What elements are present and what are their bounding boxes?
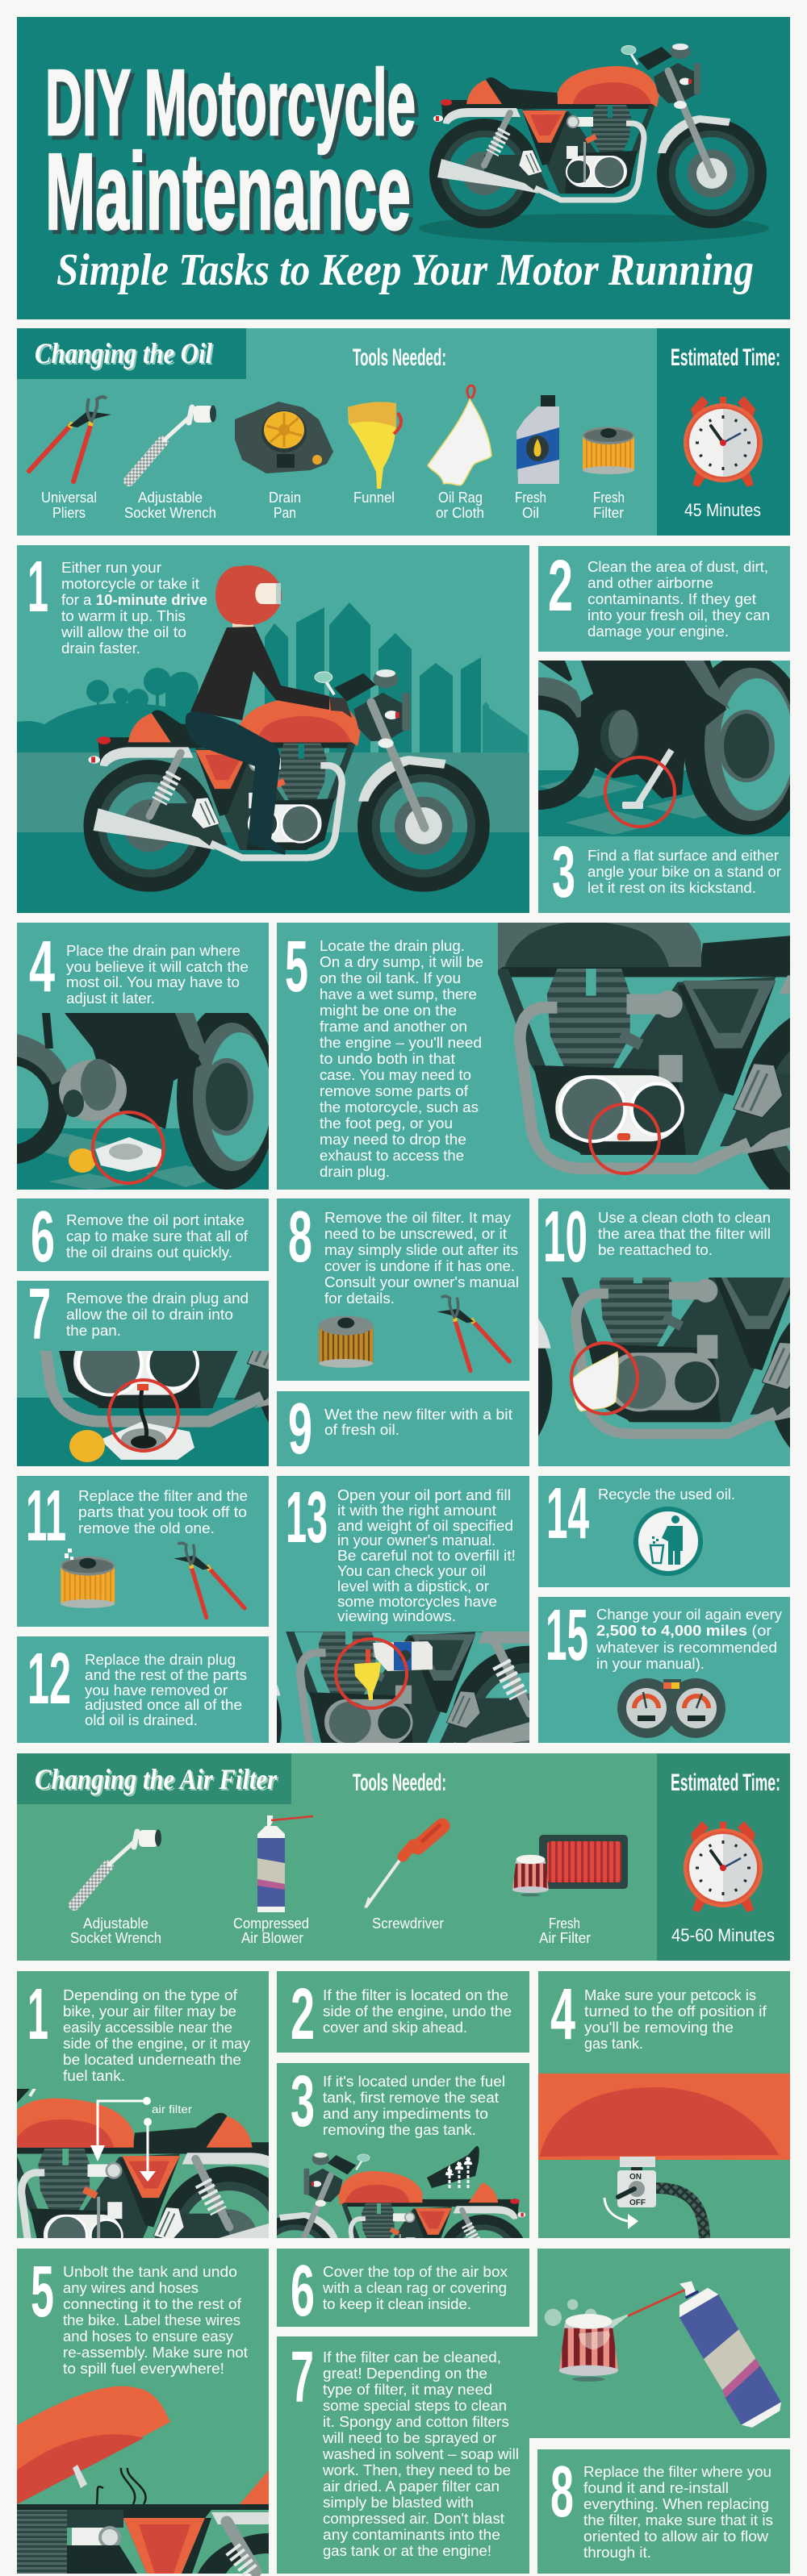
icon: alarm clock [684, 396, 763, 487]
step 13 text: You can check your oil [337, 1563, 486, 1579]
tool labels: Socket Wrench [124, 505, 216, 521]
step 5 text [63, 2264, 248, 2377]
heading: DIY Motorcycle Maintenance: DIY Motorcycle [49, 54, 420, 159]
tool labels: Drain [269, 490, 301, 506]
motorcycle with air filter callouts [17, 2089, 269, 2238]
step 5 text: drain plug. [320, 1164, 390, 1180]
gas tank and petcock illustration [538, 2074, 790, 2238]
air filter arrows: air filter [152, 2103, 192, 2115]
oil filling illustration [277, 1632, 529, 1743]
icon: dirty filter [319, 1316, 373, 1368]
panel: oil step 8 [277, 1197, 529, 1381]
step 13 text: and weight of oil specified [337, 1518, 513, 1534]
panel: air step 4 [538, 1971, 790, 2238]
icon: recycle bin [636, 1509, 700, 1574]
step 1 text: fuel tank. [63, 2068, 125, 2084]
step 8 text: need to be unscrewed, or it [324, 1226, 507, 1242]
panel: oil step 14 [538, 1473, 790, 1587]
step 8 text: cover is undone if it has one. [324, 1258, 515, 1274]
icon: fresh oil filter [583, 427, 634, 474]
tool labels: Air Blower [241, 1930, 303, 1946]
step 13 text: Open your oil port and fill [337, 1487, 511, 1503]
step number 13: 13 [286, 1478, 328, 1558]
panel: oil step 6 [17, 1197, 269, 1278]
heading: changing the oil: Changing the Oil [35, 337, 212, 369]
step 2 text [587, 559, 770, 640]
step 2 text: into your fresh oil, they can [587, 607, 770, 623]
title banner [17, 17, 790, 319]
step number 8: 8 [550, 2452, 574, 2532]
step number 1: 1 [27, 1974, 48, 2055]
step 2 text [323, 1987, 512, 2036]
step 5 text: any wires and hoses [63, 2280, 199, 2296]
oil draining illustration [17, 1351, 269, 1466]
drain pan illustration [17, 1013, 269, 1190]
step 5 text: the engine – you'll need [320, 1035, 482, 1051]
step 3 text: removing the gas tank. [323, 2122, 476, 2138]
step 5 text: may need to drop the [320, 1132, 466, 1148]
tool labels: Pan [274, 505, 296, 521]
estimated time value: 45 Minutes [684, 500, 761, 520]
step 12 text: Replace the drain plug [85, 1652, 236, 1668]
panel: oil step 7 [17, 1281, 269, 1466]
step 4 text: Place the drain pan where [66, 943, 240, 959]
step number 14: 14 [546, 1473, 589, 1554]
heading: changing the air filter: Changing the Air Filter [36, 1765, 279, 1797]
estimated time value: 45-60 Minutes [671, 1925, 775, 1945]
step 3 text [323, 2074, 505, 2138]
step 2 text: Clean the area of dust, dirt, [587, 559, 768, 575]
tool labels: Oil [522, 505, 539, 521]
step 10 text: the area that the filter will [598, 1226, 771, 1242]
icon: gauges [617, 1678, 725, 1738]
step 13 text: Be careful not to overfill it! [337, 1548, 516, 1564]
step 7 text: Remove the drain plug and [66, 1290, 249, 1307]
step 13 text: level with a dipstick, or [337, 1578, 489, 1594]
step 5 text: the foot peg, or you [320, 1115, 453, 1132]
step 7 text: washed in solvent – soap will [322, 2446, 519, 2462]
step 7 text: compressed air. Don't blast [323, 2511, 504, 2527]
step 8 text: found it and re-install [583, 2480, 729, 2496]
step 11 text: remove the old one. [78, 1520, 215, 1536]
tool labels: Air Filter [539, 1930, 591, 1946]
step 5 text: might be one on the [320, 1002, 457, 1019]
heading: tools needed: Tools Needed: [353, 344, 446, 371]
step 5 text: and hoses to ensure easy [63, 2328, 233, 2345]
step 5 text: On a dry sump, it will be [320, 954, 483, 970]
step number 11: 11 [26, 1476, 66, 1557]
icon: universal pliers [29, 397, 111, 481]
step 5 text: Locate the drain plug. [320, 938, 465, 954]
heading: changing the oil: Changing the Oil [36, 339, 214, 371]
step number 7: 7 [28, 1274, 51, 1355]
step 7 text: air dried. A paper filter can [323, 2478, 500, 2495]
panel: oil step 3 [538, 661, 790, 913]
step 15 text: in your manual). [596, 1656, 705, 1672]
spraying filter [545, 2281, 781, 2428]
step 5 text: frame and another on [320, 1019, 467, 1035]
step 5 text [320, 938, 483, 1180]
step 4 text: most oil. You may have to [66, 974, 240, 990]
step 5 text: on the oil tank. If you [320, 970, 461, 986]
step 1 text: motorcycle or take it [61, 576, 199, 592]
panel: oil step 10 [538, 1198, 790, 1466]
step 4 text [66, 943, 249, 1007]
step 4 text: gas tank. [584, 2036, 643, 2052]
step 11 text: parts that you took off to [78, 1504, 247, 1520]
step 6 text: cap to make sure that all of [66, 1228, 249, 1244]
step 5 text: to undo both in that [320, 1051, 455, 1067]
step number 10: 10 [543, 1197, 587, 1278]
step 2 text: and other airborne [587, 575, 713, 591]
step number 3: 3 [552, 832, 575, 913]
step 5 text: have a wet sump, there [320, 986, 477, 1002]
step 5 text: remove some parts of [320, 1083, 469, 1099]
icon: drain pan [235, 402, 333, 473]
panel: air spray illustration [529, 2249, 790, 2438]
tool labels: Oil Rag [438, 490, 483, 506]
heading: DIY Motorcycle Maintenance [45, 50, 420, 256]
tool labels: Funnel [353, 490, 395, 506]
tool labels: Fresh [593, 490, 625, 506]
icon: socket wrench [129, 405, 216, 481]
heading: changing the air filter: Changing the Air Filter [35, 1763, 278, 1795]
panel: oil step 4 [0, 923, 277, 1190]
panel: air step 6 [277, 2249, 529, 2332]
step 5 text: case. You may need to [320, 1067, 471, 1083]
step number 8: 8 [288, 1197, 312, 1278]
step 3 text: let it rest on its kickstand. [587, 880, 756, 896]
step 7 text: gas tank or at the engine! [323, 2543, 491, 2559]
step number 4: 4 [29, 927, 55, 1007]
step number 2: 2 [291, 1974, 315, 2055]
step 11 text: Replace the filter and the [78, 1488, 248, 1504]
step 14 text: Recycle the used oil. [598, 1486, 735, 1503]
step 8 text [583, 2464, 773, 2561]
step number 6: 6 [291, 2251, 315, 2332]
step 10 text: Use a clean cloth to clean [598, 1210, 771, 1226]
step number 4: 4 [550, 1974, 575, 2055]
step 6 text: with a clean rag or covering [322, 2280, 507, 2296]
step 1 text: Either run your [61, 560, 161, 576]
motorcycle with lifted seat [277, 2145, 526, 2238]
tool labels: Adjustable [138, 490, 203, 506]
panel: changing the air filter tools [17, 1753, 790, 1961]
step 3 text: Find a flat surface and either [587, 848, 779, 864]
lifted gas tank illustration [17, 2386, 269, 2574]
icon: pliers [174, 1543, 245, 1617]
panel: changing the oil tools [17, 328, 790, 536]
step number 12: 12 [27, 1639, 71, 1719]
icon: oil rag [428, 386, 491, 486]
step 4 text: you'll be removing the [584, 2020, 734, 2036]
step 2 text: cover and skip ahead. [323, 2020, 467, 2036]
tool labels: Universal [41, 490, 97, 506]
panel: air step 1 [17, 1971, 269, 2238]
icon: socket wrench [74, 1829, 161, 1905]
cleaning illustration [538, 1278, 790, 1448]
panel: oil step 15 [538, 1595, 790, 1743]
icon: drips [65, 1549, 73, 1560]
step 7 text: type of filter, it may need [323, 2382, 492, 2398]
step 8 text: everything. When replacing [583, 2496, 769, 2512]
step 5 text: connecting it to the rest of [63, 2296, 242, 2312]
tool labels [70, 1915, 591, 1946]
drain plug illustration [498, 923, 790, 1190]
air filter arrows [90, 2097, 192, 2182]
step 15 text: 2,500 to 4,000 miles (or [596, 1623, 771, 1639]
step 7 text: the pan. [66, 1323, 121, 1339]
step 1 text: side of the engine, or it may [63, 2036, 250, 2052]
step 8 text: the filter, make sure that it is [583, 2512, 773, 2528]
step 7 text [322, 2349, 519, 2559]
step 15 text [596, 1607, 782, 1672]
step 1 text: drain faster. [61, 640, 140, 657]
step 1 text: bike, your air filter may be [63, 2003, 236, 2020]
step 13 text: some motorcycles have [337, 1594, 497, 1610]
step 4 text: you believe it will catch the [66, 959, 249, 975]
step 12 text: and the rest of the parts [85, 1667, 247, 1683]
step 6 text: to keep it clean inside. [323, 2296, 471, 2312]
step 13 text: in your owner's manual. [337, 1532, 495, 1549]
step 2 text: side of the engine, undo the [323, 2003, 512, 2020]
tool labels: Screwdriver [372, 1915, 444, 1932]
step number 5: 5 [31, 2252, 54, 2332]
icon: alarm clock [684, 1821, 763, 1912]
icon: fresh air filters [512, 1835, 628, 1896]
step 6 text [322, 2264, 508, 2312]
tool labels: Socket Wrench [70, 1930, 161, 1946]
tool labels: or Cloth [436, 505, 484, 521]
step 1 text [63, 1987, 250, 2084]
step 13 text: it with the right amount [337, 1503, 496, 1519]
step 8 text: may simply slide out after its [324, 1242, 518, 1258]
step 1 text: to warm it up. This [61, 608, 186, 624]
heading: DIY Motorcycle Maintenance: Maintenance [45, 131, 411, 252]
step 3 text: tank, first remove the seat [323, 2090, 499, 2106]
panel: oil step 13 [277, 1476, 529, 1743]
panel: oil step 1 [17, 545, 529, 913]
tool labels: Pliers [52, 505, 86, 521]
step 9 text [324, 1407, 512, 1438]
step 3 text [587, 848, 781, 896]
step 5 text: re-assembly. Make sure not [63, 2345, 248, 2361]
step 8 text: Remove the oil filter. It may [324, 1210, 511, 1226]
tool labels: Filter [593, 505, 624, 521]
panel: oil step 2 [538, 546, 790, 652]
step 6 text: the oil drains out quickly. [66, 1244, 232, 1261]
step 6 text: Cover the top of the air box [323, 2264, 508, 2280]
gas tank and petcock illustration: ON [629, 2173, 642, 2182]
step 7 text [66, 1290, 249, 1339]
step 2 text: contaminants. If they get [587, 591, 756, 607]
heading: DIY Motorcycle Maintenance: Maintenance [49, 135, 415, 256]
gas tank and petcock illustration: OFF [629, 2199, 646, 2207]
icon: new filter [61, 1557, 115, 1608]
step 7 text: will need to be sprayed or [322, 2430, 496, 2446]
step 8 text: for details. [324, 1290, 395, 1307]
panel: air step 3 [277, 2063, 529, 2238]
step 1 text: be located underneath the [63, 2052, 241, 2068]
tool labels [41, 490, 625, 521]
step 4 text: turned to the off position if [584, 2003, 767, 2020]
step number 7: 7 [291, 2337, 314, 2418]
step 12 text: old oil is drained. [85, 1712, 198, 1728]
panel: air step 8 [537, 2449, 790, 2574]
city skyline and park background [17, 602, 529, 913]
step 11 text [78, 1488, 248, 1536]
step 1 text: for a 10-minute drive [61, 592, 207, 608]
step 9 text: Wet the new filter with a bit [324, 1407, 512, 1423]
step 4 text: adjust it later. [66, 990, 155, 1007]
step number 6: 6 [31, 1197, 55, 1278]
tool labels: Adjustable [83, 1915, 148, 1932]
icon: funnel [348, 402, 401, 489]
tool labels: Fresh [549, 1915, 580, 1932]
motorcycle with rider [89, 565, 483, 885]
panel: oil step 5 [277, 923, 790, 1190]
step 7 text: great! Depending on the [323, 2366, 487, 2382]
heading: DIY Motorcycle Maintenance: DIY Motorcycle [45, 50, 416, 155]
step 10 text: be reattached to. [598, 1242, 713, 1258]
step 13 text [337, 1487, 516, 1624]
step 1 text: will allow the oil to [61, 624, 186, 640]
step 5 text: the bike. Label these wires [63, 2312, 240, 2328]
step 7 text: some special steps to clean [323, 2398, 507, 2414]
step 5 text: the motorcycle, such as [320, 1099, 479, 1115]
step 7 text: any contaminants into the [323, 2527, 500, 2543]
step 7 text: work. Then, they need to be [322, 2462, 511, 2478]
step 8 text: Consult your owner's manual [324, 1274, 519, 1290]
step 13 text: viewing windows. [337, 1608, 456, 1624]
step 8 text: oriented to allow air to flow [583, 2528, 769, 2545]
icon: compressed air can [257, 1815, 313, 1912]
step 7 text: If the filter can be cleaned, [323, 2349, 501, 2366]
step 12 text [85, 1652, 247, 1728]
step 6 text [66, 1212, 249, 1261]
step number 9: 9 [288, 1389, 312, 1469]
step 8 text [324, 1210, 519, 1307]
step 1 text: easily accessible near the [63, 2020, 232, 2036]
step 9 text: of fresh oil. [324, 1422, 399, 1438]
step 7 text: simply be blasted with [323, 2495, 474, 2511]
step 15 text: Change your oil again every [596, 1607, 782, 1623]
heading: tools needed: Tools Needed: [353, 1769, 446, 1796]
icon: pliers [437, 1296, 509, 1370]
step 2 text: If the filter is located on the [323, 1987, 508, 2003]
panel: oil step 9 [277, 1389, 529, 1469]
tool labels: Compressed [233, 1915, 309, 1932]
step number 15: 15 [546, 1595, 588, 1676]
step 4 text [584, 1987, 767, 2052]
icon: fresh oil bottle [516, 395, 559, 484]
step number 1: 1 [27, 547, 48, 627]
step 1 text [61, 560, 207, 657]
step 7 text: it. Spongy and cotton filters [323, 2414, 509, 2430]
step 10 text [598, 1210, 771, 1258]
step 8 text: Replace the filter where you [583, 2464, 771, 2480]
panel: oil step 11 [17, 1476, 269, 1627]
step 5 text: Unbolt the tank and undo [63, 2264, 237, 2280]
step number 5: 5 [285, 927, 308, 1007]
kickstand illustration [538, 661, 790, 836]
hero motorcycle illustration [419, 44, 769, 243]
tool labels: Fresh [515, 490, 546, 506]
step 7 text: allow the oil to drain into [66, 1307, 233, 1323]
step 4 text: Make sure your petcock is [584, 1987, 756, 2003]
panel: air step 7 [277, 2336, 529, 2574]
step 8 text: through it. [583, 2545, 651, 2561]
step number 2: 2 [548, 546, 573, 627]
panel: air step 5 [17, 2249, 269, 2574]
step 12 text: you have removed or [85, 1682, 228, 1699]
step 5 text: exhaust to access the [320, 1148, 464, 1164]
step 2 text: damage your engine. [587, 623, 729, 640]
step 15 text: whatever is recommended [596, 1640, 777, 1656]
panel: oil step 12 [17, 1636, 269, 1743]
step 3 text: If it's located under the fuel [323, 2074, 505, 2090]
step 3 text: and any impediments to [323, 2106, 488, 2122]
step 6 text: Remove the oil port intake [66, 1212, 245, 1228]
step number 3: 3 [291, 2061, 315, 2142]
step 5 text: to spill fuel everywhere! [63, 2361, 224, 2377]
step 1 text: Depending on the type of [63, 1987, 238, 2003]
panel: air step 2 [277, 1971, 529, 2055]
step 12 text: adjusted once all of the [85, 1697, 242, 1713]
icon: screwdriver [364, 1824, 442, 1909]
rider [186, 565, 352, 855]
step 3 text: angle your bike on a stand or [587, 864, 781, 880]
